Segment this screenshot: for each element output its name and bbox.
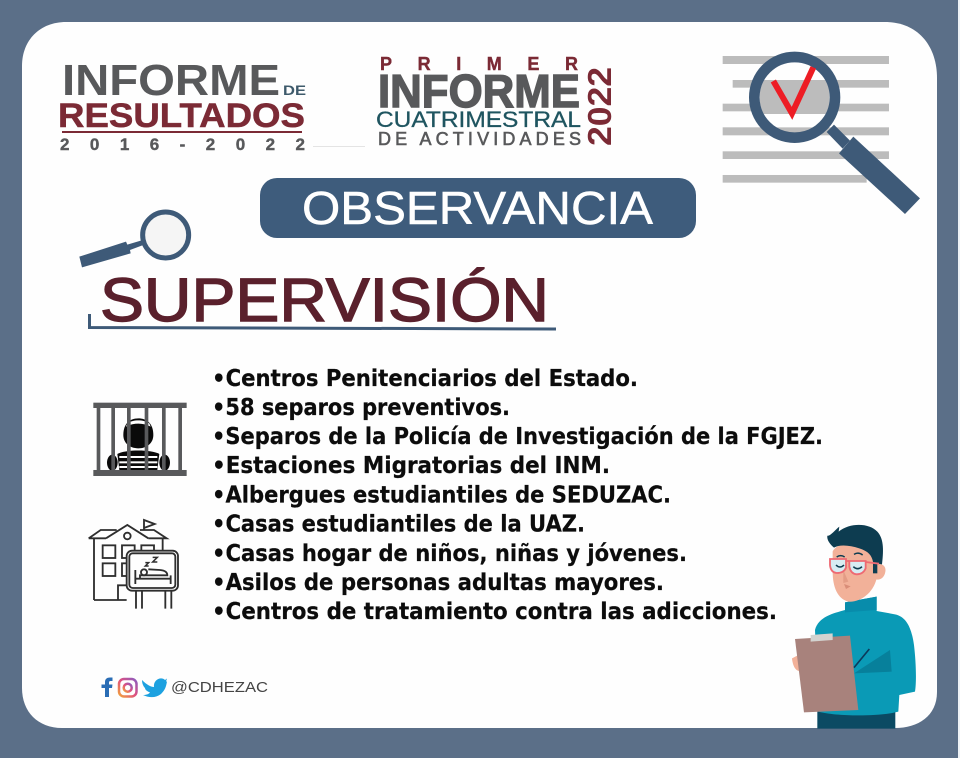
icon: magnifier over document with check [723, 56, 920, 214]
list: supervised places [212, 364, 823, 625]
logo: Primer Informe Cuatrimestral 2022: 2022 [581, 67, 618, 146]
icon: facebook [102, 678, 112, 697]
icon: dormitory building and bed sign [89, 520, 178, 609]
icon: prisoner behind bars [93, 403, 187, 476]
social: handle and icons [102, 678, 268, 697]
logo: Primer Informe Cuatrimestral 2022: CUATRIMESTRAL [376, 107, 581, 132]
logo: Informe de Resultados 2016-2022: DE [283, 82, 306, 98]
logo: Informe de Resultados 2016-2022: 2016-2022 [60, 135, 305, 154]
icon: instagram [119, 679, 136, 696]
logo: Primer Informe Cuatrimestral 2022: PRIMER [380, 54, 578, 74]
icon: twitter [142, 678, 167, 697]
text: handle: @CDHEZAC [171, 680, 268, 696]
list: supervised places: •Estaciones Migratorias del INM. [212, 451, 610, 479]
list: supervised places: •Casas hogar de niños, niñas y jóvenes. [212, 539, 687, 567]
logo: Primer Informe Cuatrimestral 2022 [376, 54, 618, 149]
logo: Informe de Resultados 2016-2022: RESULTADOS [58, 97, 305, 135]
list: supervised places: •Centros Penitenciarios del Estado. [212, 364, 638, 392]
logo: Primer Informe Cuatrimestral 2022: INFORME [378, 65, 580, 117]
logo: Informe de Resultados 2016-2022: INFORME [62, 56, 280, 105]
banner: Observancia: OBSERVANCIA [302, 182, 653, 234]
list: supervised places: •Separos de la Policía de Investigación de la FGJEZ. [212, 422, 823, 450]
illustration: man with clipboard [792, 525, 916, 729]
list: supervised places: •Asilos de personas adultas mayores. [212, 568, 664, 596]
heading: Supervisión: SUPERVISIÓN [100, 266, 549, 334]
list: supervised places: •Casas estudiantiles de la UAZ. [212, 510, 585, 538]
list: supervised places: •58 separos preventivos. [212, 393, 510, 421]
icon: small magnifier [79, 212, 189, 267]
list: supervised places: •Centros de tratamiento contra las adicciones. [212, 597, 777, 625]
list: supervised places: •Albergues estudiantiles de SEDUZAC. [212, 480, 671, 508]
logo: Primer Informe Cuatrimestral 2022: DE ACTIVIDADES [378, 129, 581, 149]
logo: Informe de Resultados 2016-2022 [58, 56, 365, 154]
banner: Observancia [260, 178, 696, 238]
